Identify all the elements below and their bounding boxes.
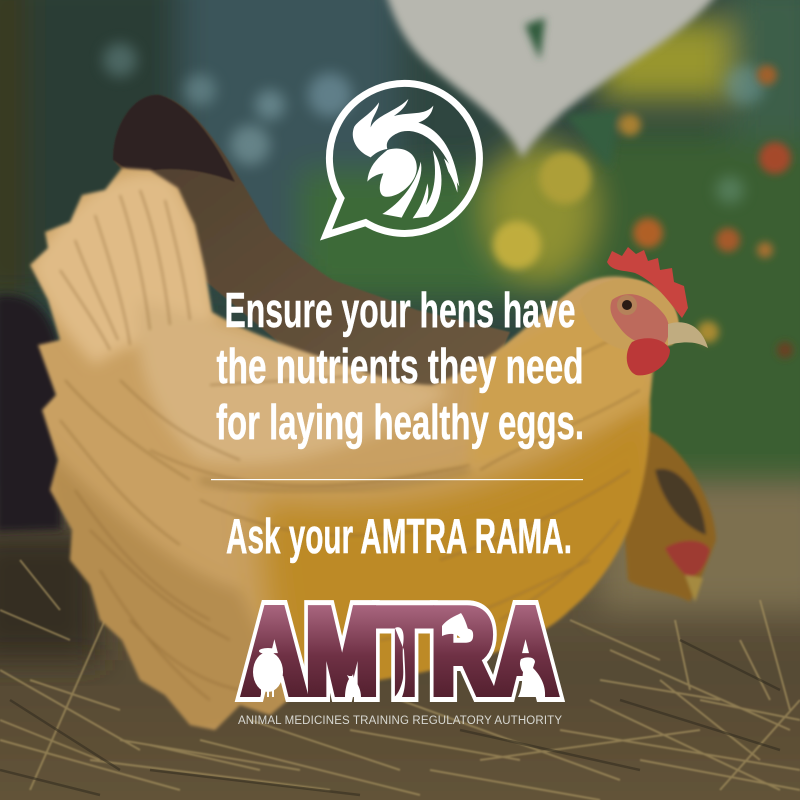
third hen at right: [620, 430, 716, 602]
brown hen behind: [113, 95, 510, 395]
background photo: straw ground: [0, 480, 800, 800]
headline: for laying healthy eggs.: [216, 396, 584, 450]
headline: the nutrients they need: [216, 340, 584, 394]
main hen body: [28, 166, 656, 732]
divider: [211, 479, 583, 480]
feather strokes: [60, 190, 640, 700]
icon: cat: [345, 674, 361, 697]
tail plumage highlights: [30, 172, 215, 365]
icon: dog: [518, 657, 545, 697]
sky: [385, 0, 720, 158]
wattle: [627, 338, 670, 375]
logo: rooster speech bubble: [326, 83, 479, 235]
rooster head and plumage: [353, 99, 459, 218]
icon: horse: [394, 613, 471, 697]
comb: [607, 247, 688, 318]
black hen at left: [0, 295, 62, 532]
wing highlights: [138, 300, 450, 464]
face: [610, 294, 669, 345]
hen head: [580, 247, 708, 375]
call to action: Ask your AMTRA RAMA.: [226, 510, 572, 564]
icon: sheep: [253, 648, 283, 697]
lower body shading: [244, 392, 652, 697]
logo wordmark: AMTRA: [243, 585, 557, 718]
eye: [617, 295, 637, 315]
dark feather fold: [200, 470, 470, 491]
beak: [668, 322, 708, 348]
headline: [216, 284, 584, 450]
logo tagline: ANIMAL MEDICINES TRAINING REGULATORY AUTHORITY: [238, 715, 562, 727]
speech bubble outline: [326, 83, 479, 235]
logo wordmark: AMTRA: [243, 585, 557, 718]
AMTRA logo: [238, 585, 562, 727]
headline: Ensure your hens have: [224, 284, 576, 338]
